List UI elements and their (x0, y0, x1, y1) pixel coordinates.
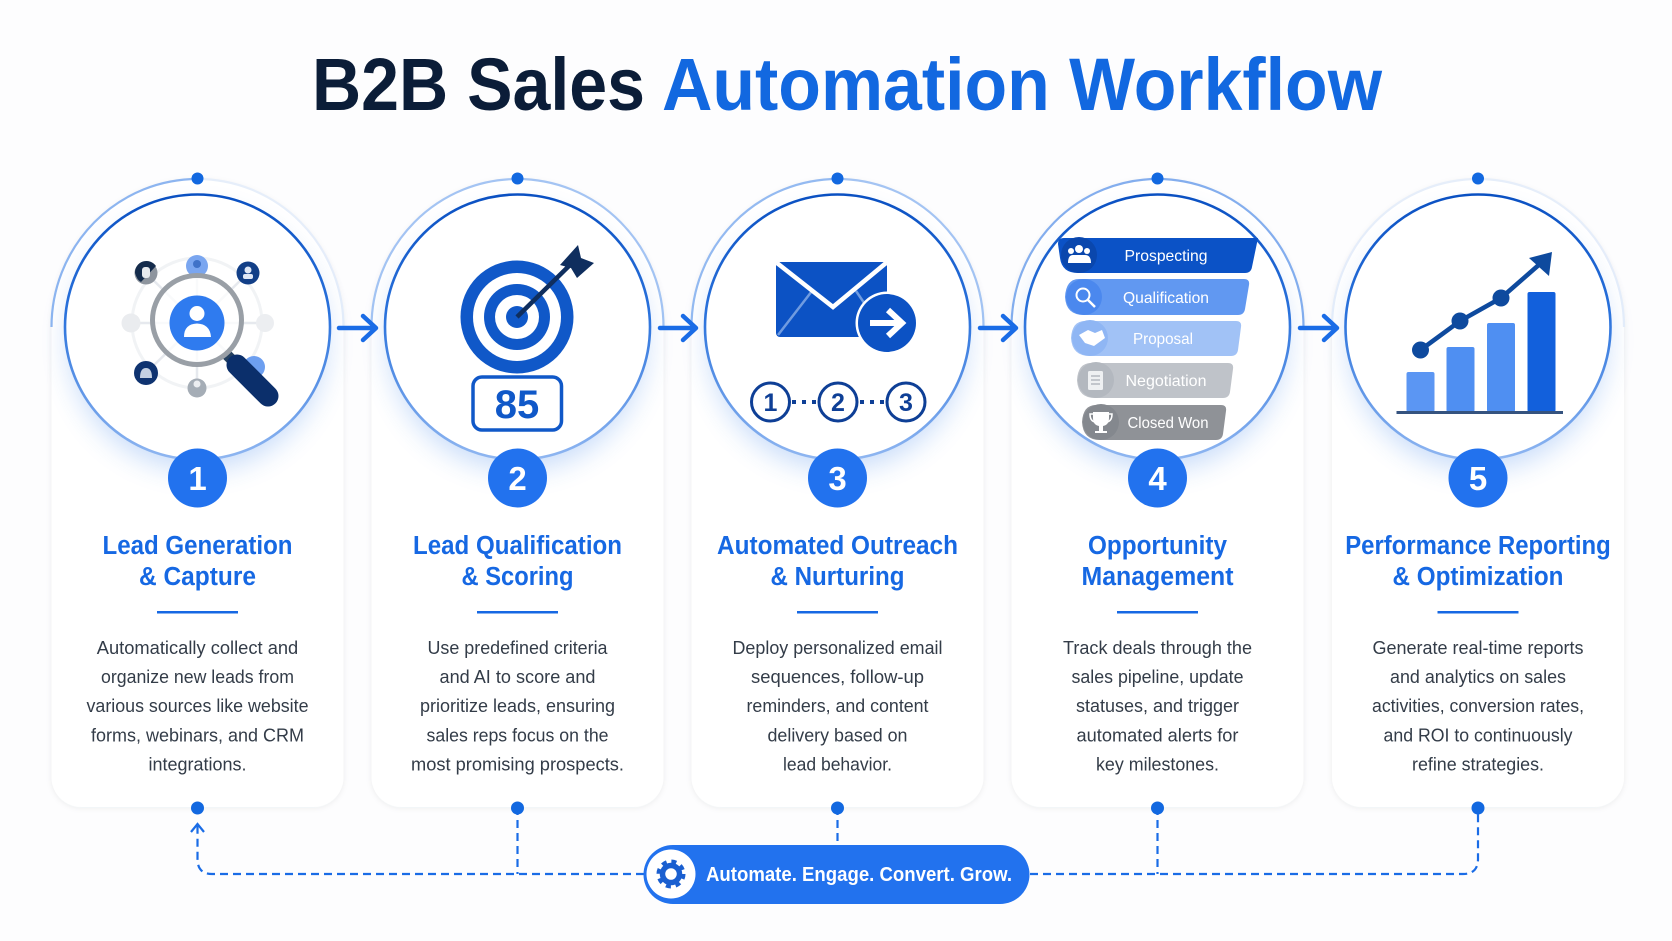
step number 4: 4 (1148, 460, 1167, 497)
body text: key milestones. (1096, 754, 1219, 774)
stage: qualification (1065, 279, 1249, 315)
heading: Opportunity (1088, 532, 1228, 560)
icon: target with arrow and score (460, 245, 594, 430)
icon: growth bar chart (1396, 252, 1563, 414)
panel: step 2 lead qualification (372, 172, 664, 807)
body text: and analytics on sales (1390, 666, 1566, 687)
title: Automation Workflow (662, 43, 1382, 126)
panel: step 5 performance reporting (1332, 172, 1624, 807)
heading: & Capture (139, 563, 256, 591)
body text: most promising prospects. (411, 754, 624, 774)
body text: Generate real-time reports (1372, 637, 1584, 658)
stage: prospecting: Prospecting (1124, 248, 1208, 265)
body text: lead behavior. (783, 754, 892, 774)
dashed feedback connectors (191, 802, 1484, 874)
body text: sales reps focus on the (426, 724, 608, 746)
heading: Lead Qualification (413, 532, 622, 560)
heading: Lead Generation (102, 532, 292, 560)
icon: envelope with arrow and sequence: 1 (764, 389, 778, 417)
step number 4 (1128, 448, 1187, 508)
icon: envelope with arrow and sequence (752, 262, 925, 421)
body text: Deploy personalized email (732, 637, 942, 658)
stage: proposal: Proposal (1133, 331, 1193, 348)
body text: forms, webinars, and CRM (91, 724, 304, 746)
body text: refine strategies. (1412, 754, 1544, 774)
step number 5 (1448, 448, 1508, 508)
body text: statuses, and trigger (1076, 695, 1239, 716)
icon: target with arrow and score: 85 (495, 383, 539, 427)
panel: step 4 opportunity management (1012, 172, 1304, 807)
heading: & Nurturing (770, 563, 904, 591)
heading: Management (1082, 563, 1234, 591)
stage: negotiation (1077, 362, 1233, 398)
body text: reminders, and content (746, 695, 928, 716)
panel: step 1 lead generation (52, 172, 344, 807)
slogan pill: Automate. Engage. Convert. Grow. (706, 864, 1012, 886)
body text (411, 637, 624, 774)
step number 5: 5 (1469, 460, 1487, 497)
step number 1 (168, 448, 227, 508)
body text: sequences, follow-up (751, 666, 924, 687)
stage: qualification: Qualification (1123, 290, 1209, 307)
icon: sales pipeline funnel (1058, 237, 1258, 440)
icon: envelope with arrow and sequence: 2 (831, 389, 845, 417)
body text (1063, 637, 1252, 774)
stage: proposal (1071, 320, 1241, 356)
body text: Automatically collect and (97, 637, 298, 658)
heading: Performance Reporting (1345, 532, 1611, 560)
arrow 3 to 4 (980, 316, 1016, 340)
body text: and AI to score and (440, 666, 596, 687)
body text (86, 637, 308, 774)
heading (1082, 532, 1234, 591)
arrow 2 to 3 (660, 316, 696, 340)
slogan pill (644, 845, 1030, 904)
step number 2 (488, 448, 547, 508)
body text: integrations. (148, 754, 246, 774)
arrow 4 to 5 (1300, 316, 1337, 340)
stage: closed won: Closed Won (1128, 415, 1208, 432)
title (312, 43, 1382, 126)
icon: envelope with arrow and sequence: 3 (899, 389, 913, 417)
body text: automated alerts for (1076, 724, 1238, 746)
body text: organize new leads from (101, 666, 294, 687)
icon: lead network and magnifier (122, 255, 274, 398)
stage: prospecting (1058, 237, 1258, 273)
heading (1345, 532, 1611, 591)
body text: and ROI to continuously (1384, 724, 1573, 746)
heading (717, 532, 958, 591)
body text: Track deals through the (1063, 637, 1252, 658)
panel: step 3 automated outreach (692, 172, 984, 807)
heading (102, 532, 292, 591)
title: B2B Sales (312, 43, 645, 126)
step number 3 (808, 448, 867, 508)
step number 1: 1 (188, 460, 207, 497)
heading: Automated Outreach (717, 532, 958, 560)
heading: & Optimization (1392, 563, 1564, 591)
arrow 1 to 2 (339, 316, 376, 340)
stage: negotiation: Negotiation (1126, 373, 1206, 390)
body text: activities, conversion rates, (1372, 695, 1584, 716)
body text: sales pipeline, update (1072, 666, 1244, 687)
step number 3: 3 (828, 460, 847, 497)
stage: closed won (1082, 404, 1226, 440)
heading: & Scoring (462, 563, 574, 591)
body text: delivery based on (768, 724, 908, 746)
body text (1372, 637, 1584, 774)
body text: prioritize leads, ensuring (420, 695, 615, 716)
body text: various sources like website (86, 695, 308, 716)
step number 2: 2 (508, 460, 527, 497)
heading (413, 532, 622, 591)
body text (732, 637, 942, 774)
body text: Use predefined criteria (428, 637, 608, 658)
